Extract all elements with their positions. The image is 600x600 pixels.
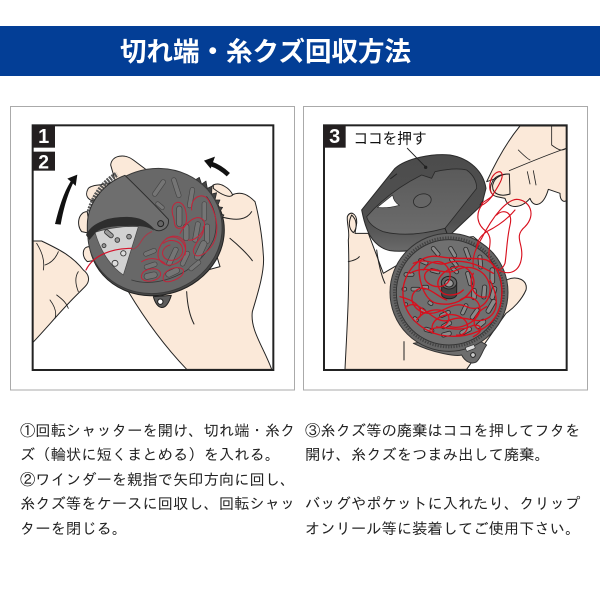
right hand pinching thread [487, 126, 567, 206]
panel: steps 1 and 2 [10, 106, 294, 390]
winder teeth [89, 174, 117, 212]
text block: step 3 and usage: 開け、糸クズをつまみ出して廃棄。 [305, 447, 550, 464]
red thread scraps [86, 196, 217, 282]
left hand holding the base [345, 213, 526, 369]
callout leader line [407, 148, 427, 169]
case slots [143, 177, 210, 280]
center post [441, 276, 457, 299]
header banner [0, 26, 600, 76]
title: 切れ端・糸クズ回収方法 [120, 37, 411, 67]
text block: steps 1 and 2: 糸クズ等をケースに回収し、回転シャッ [20, 496, 295, 513]
text block: steps 1 and 2: ②ワインダーを親指で矢印方向に回し、 [20, 472, 295, 489]
inner frame [33, 125, 273, 370]
text block: step 3 and usage: バッグやポケットに入れたり、クリップ [305, 496, 580, 513]
window with triangular plate [95, 227, 138, 275]
arrow: left curved [55, 175, 77, 225]
illustrations [10, 106, 588, 390]
right hand holding the case [79, 156, 272, 369]
badge: step 1: 1 [38, 126, 49, 148]
badge: step 3 [324, 125, 346, 148]
left hand pinching thread [33, 241, 89, 343]
label: press here: ココを押す [353, 130, 427, 147]
base slots [402, 246, 497, 338]
case base [390, 233, 508, 363]
badge: step 2: 2 [38, 152, 49, 173]
open lid [362, 155, 486, 251]
inner frame [324, 125, 567, 370]
lid window [377, 195, 399, 208]
text block: steps 1 and 2: ①回転シャッターを開け、切れ端・糸ク [20, 422, 295, 440]
text block: step 3 and usage [305, 422, 580, 538]
text block: steps 1 and 2 [20, 422, 295, 538]
hand creases [187, 212, 252, 324]
tangled red thread [400, 256, 502, 337]
text block: steps 1 and 2: ズ（輪状に短くまとめる）を入れる。 [20, 447, 280, 464]
badge: step 1 [33, 125, 55, 148]
badge: step 2 [33, 152, 55, 173]
text block: step 3 and usage: ③糸クズ等の廃棄はココを押してフタを [305, 422, 580, 440]
text block: steps 1 and 2: ターを閉じる。 [20, 521, 127, 538]
pulled-out thread loops [473, 172, 531, 273]
arrow: right curved [204, 157, 228, 175]
rotating shutter [87, 175, 169, 234]
badge: step 3: 3 [329, 126, 340, 148]
case body [89, 200, 225, 296]
panel: step 3 [304, 106, 588, 390]
text block: step 3 and usage: オンリール等に装着してご使用下さい。 [305, 521, 580, 538]
